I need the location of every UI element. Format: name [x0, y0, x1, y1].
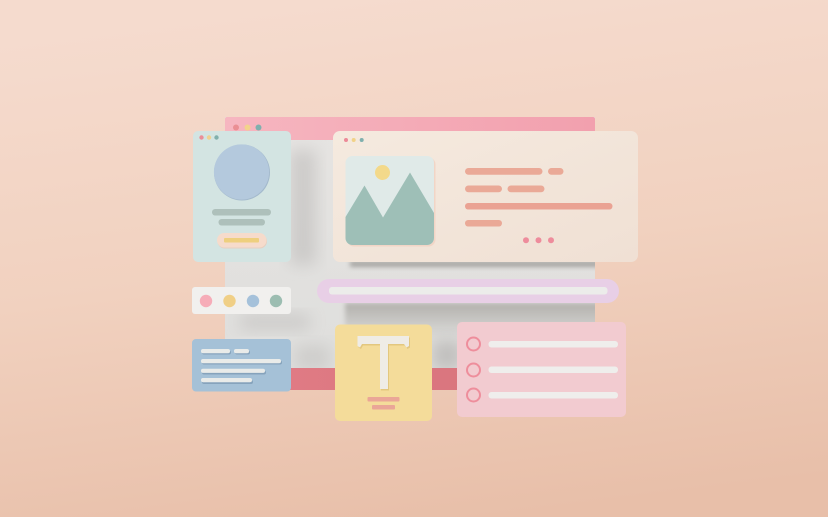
card text lines — [201, 349, 281, 382]
card dots — [344, 138, 364, 142]
image and text card — [333, 131, 638, 262]
typography card — [335, 324, 432, 421]
profile card dots — [199, 135, 219, 140]
text lines — [368, 397, 400, 410]
checklist row 1 — [467, 338, 618, 350]
profile card — [193, 131, 291, 262]
checklist row 2 — [467, 364, 618, 376]
pagination dots — [523, 237, 554, 243]
line shadows — [202, 350, 282, 384]
window control dots — [233, 124, 262, 130]
avatar circle — [214, 144, 270, 200]
window title bar — [225, 117, 595, 140]
profile button — [217, 233, 267, 248]
back browser window — [225, 117, 595, 390]
checklist card — [457, 322, 626, 417]
colour swatch card — [192, 287, 291, 314]
checklist row 3 — [467, 388, 618, 402]
icon: sun — [375, 165, 390, 180]
blue text card — [192, 339, 291, 392]
name lines — [212, 209, 271, 226]
search bar — [317, 279, 619, 303]
cast shadows on window — [240, 150, 605, 370]
window bottom bar — [225, 368, 595, 390]
icon: letter T — [358, 336, 410, 390]
text lines — [465, 168, 612, 226]
icon: mountains — [346, 172, 434, 245]
image placeholder — [346, 156, 436, 246]
